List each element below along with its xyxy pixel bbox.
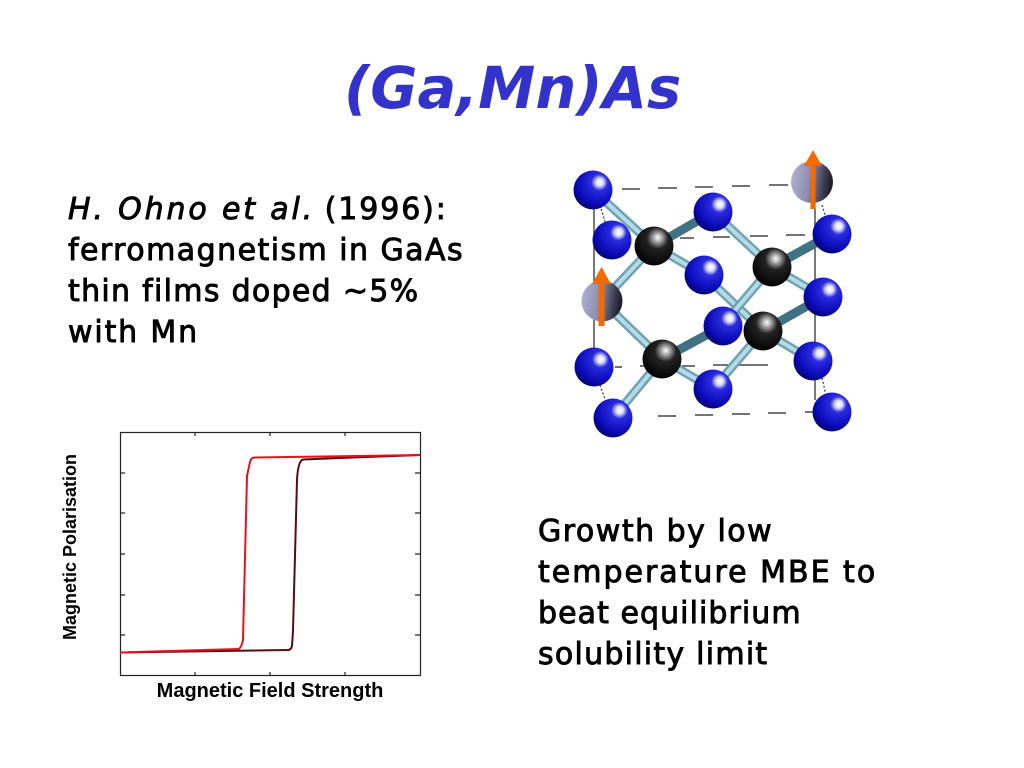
title: (Ga,Mn)As — [344, 55, 681, 122]
y axis label: Magnetic Polarisation — [60, 454, 80, 640]
arrow: spin up — [804, 150, 822, 209]
text block: growth method — [538, 514, 877, 672]
curve: dark branch — [120, 455, 420, 652]
text block: Ohno discovery: H. Ohno et al. (1996): — [68, 192, 448, 227]
text block: growth method: temperature MBE to — [538, 555, 877, 590]
text block: Ohno discovery: thin films doped ~5% — [68, 274, 420, 309]
arrow: spin up — [592, 267, 611, 326]
text block: Ohno discovery: ferromagnetism in GaAs — [68, 233, 464, 268]
spheres — [574, 170, 852, 438]
cell edges — [594, 185, 815, 416]
x axis label: Magnetic Field Strength — [157, 680, 383, 702]
text block: Ohno discovery: with Mn — [68, 315, 199, 350]
bonds — [593, 190, 832, 418]
text block: growth method: solubility limit — [538, 637, 768, 672]
plot frame and ticks — [120, 432, 420, 676]
text block: Ohno discovery — [68, 192, 464, 350]
text block: growth method: Growth by low — [538, 514, 773, 549]
text block: growth method: beat equilibrium — [538, 596, 802, 631]
curve: red branch — [120, 455, 420, 652]
